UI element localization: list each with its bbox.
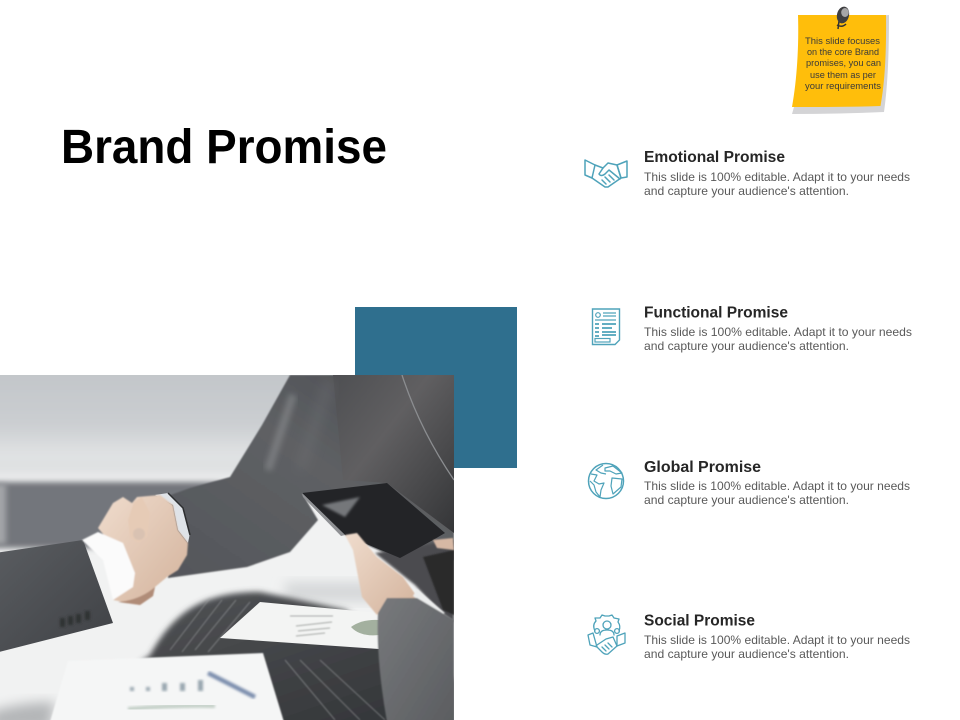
title: Brand Promise [61,121,387,174]
photo tablet [302,483,454,622]
photo paper front [50,653,284,720]
promise: emotional [585,149,910,198]
promise: global [588,459,910,507]
photo shaking hands [82,495,188,605]
description [644,633,910,661]
description [644,170,910,198]
heading: Social Promise [644,612,755,630]
note paper [792,15,886,107]
heading: Functional Promise [644,304,788,322]
photo: business handshake [0,375,454,720]
icon: document [592,309,620,344]
note text: This slide focuses [805,36,881,46]
heading: Emotional Promise [644,149,785,166]
photo right suit [155,375,454,578]
note text [805,36,882,91]
description: and capture your audience's attention. [644,339,849,353]
teal square [355,307,517,468]
icon: push pin [835,5,851,29]
note text: your requirements [805,81,882,91]
description: and capture your audience's attention. [644,493,849,507]
description: This slide is 100% editable. Adapt it to your needs [644,479,910,493]
note text: use them as per [810,70,876,80]
photo paper with charts [220,602,379,649]
promise: social [588,612,910,661]
photo table [0,582,454,720]
note shadow [792,15,889,114]
icon: gear, people and handshake [588,615,625,654]
description [644,325,912,353]
description: and capture your audience's attention. [644,184,849,198]
photo left suit and cuff [0,540,113,653]
note text: promises, you can [806,58,881,68]
description: This slide is 100% editable. Adapt it to your needs [644,170,910,184]
sticky note [792,5,889,114]
photo background wall [0,375,333,552]
icon: handshake [585,160,627,187]
description: This slide is 100% editable. Adapt it to your needs [644,325,912,339]
icon: globe [588,464,624,498]
note text: on the core Brand [807,47,879,57]
promise: functional [592,304,912,353]
photo right hand and sleeve [345,533,454,720]
heading: Global Promise [644,459,761,476]
description: and capture your audience's attention. [644,647,849,661]
description [644,479,910,507]
description: This slide is 100% editable. Adapt it to your needs [644,633,910,647]
